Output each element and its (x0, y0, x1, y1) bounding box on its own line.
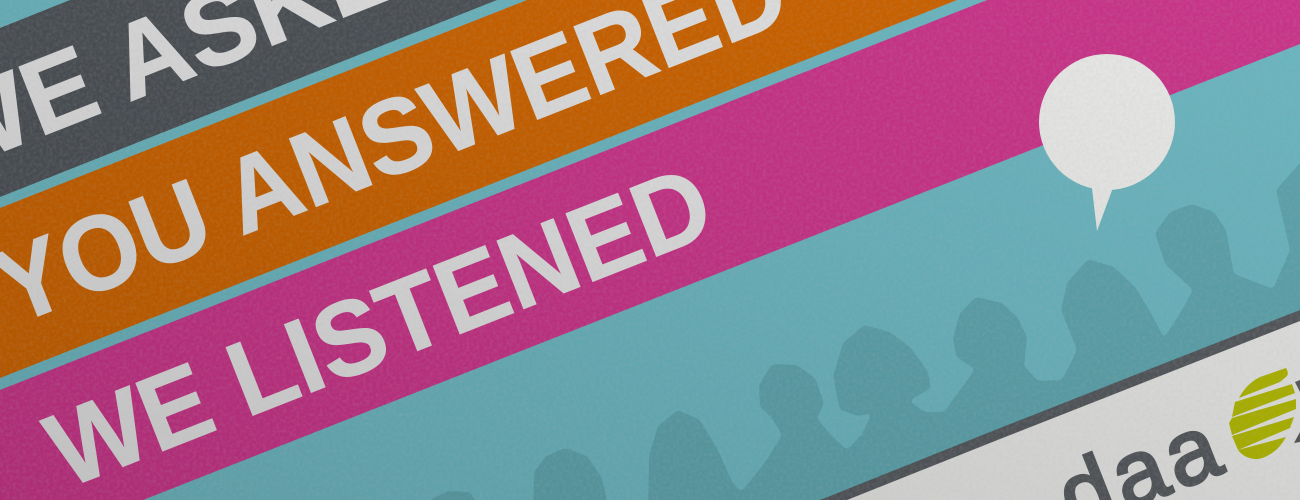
logo icon: cropped dark marks (1294, 380, 1300, 443)
crowd silhouettes (425, 150, 1300, 500)
heading: we listened: WE LISTENED (31, 143, 728, 500)
logo icon: green striped globe (1229, 368, 1296, 459)
logo panel (820, 310, 1300, 500)
band: we asked (0, 0, 497, 197)
speech bubble (1039, 54, 1175, 231)
